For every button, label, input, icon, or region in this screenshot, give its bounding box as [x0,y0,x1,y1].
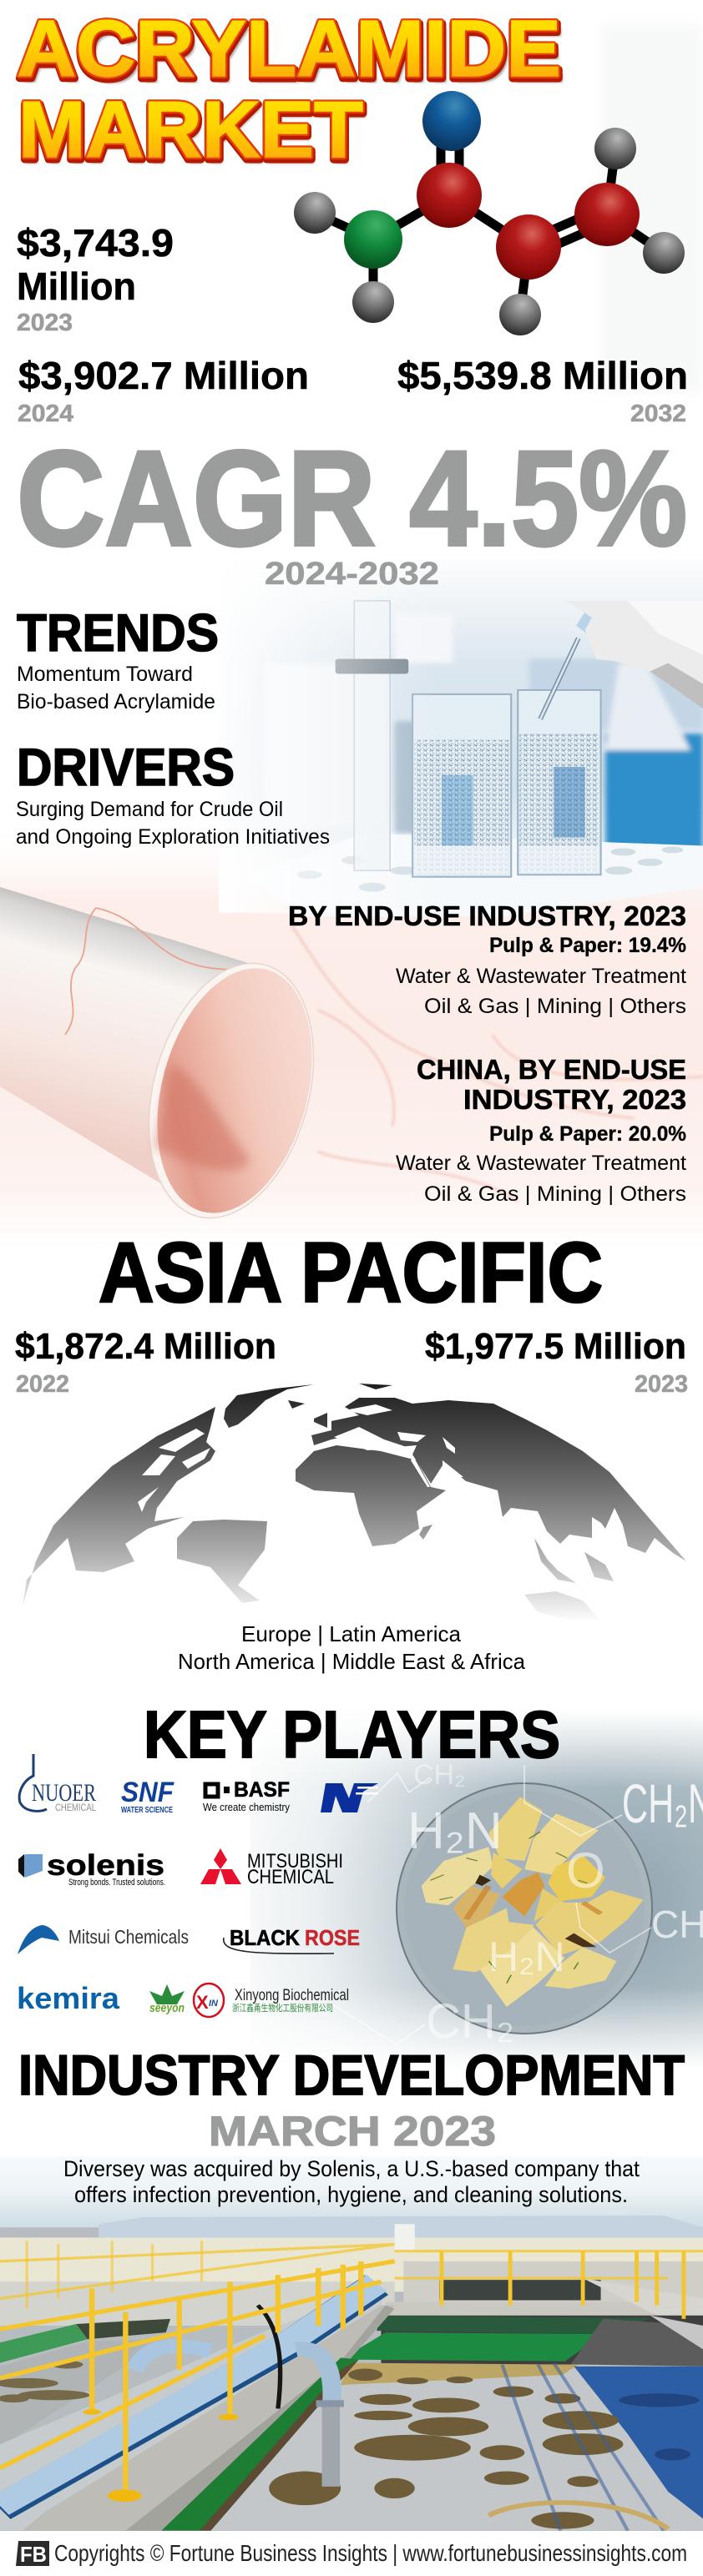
panel: laboratory photo [219,559,703,916]
text block: China by end-use industry: INDUSTRY, 2023 [463,1084,686,1115]
stat: 2024 market value: 2024 [18,401,73,427]
text block: development description: offers infection prevention, hygiene, and cleaning solutions. [74,2182,628,2207]
stat: 2032 market value: $5,539.8 Million [397,354,688,397]
logo: Mitsubishi Chemical: MITSUBISHI [247,1850,343,1873]
logo: Solenis [18,1849,165,1888]
logo: Nuoer Chemical: CHEMICAL [55,1802,96,1813]
chemical formula overlay: O [566,1843,605,1898]
stat: 2023 market value: 2023 [17,310,73,336]
subheading: date: MARCH 2023 [209,2108,496,2155]
logo: Kemira: kemira [17,1981,120,2015]
text block: other regions: North America | Middle East & Africa [178,1649,526,1674]
logo: Seeyon [149,1984,185,2015]
food [422,1797,644,2007]
heading: key players: KEY PLAYERS [144,1697,560,1772]
background: faint haze behind molecule [601,25,703,392]
logo: Seeyon: seeyon [149,2001,185,2015]
logo: Black Rose: ROSE [305,1925,360,1950]
title: ACRYLAMIDE [18,7,562,96]
beakers [412,694,511,877]
title: ACRYLAMIDE [17,4,561,93]
walkway [23,2306,395,2531]
chemical formula overlay: CH₂ [426,1994,514,2049]
left basin [0,2339,166,2447]
logo: Xinyong Biochemical: X [196,1992,209,2013]
chemical formula overlay: H₂N [488,1933,565,1980]
text block: China by end-use industry: Oil & Gas | Mining | Others [424,1182,686,1206]
logo: SNF Water Science: WATER SCIENCE [121,1806,173,1815]
logo: BASF [203,1778,290,1813]
text block: by end-use industry: BY END-USE INDUSTRY, 2023 [288,900,686,931]
text block: development description: Diversey was acquired by Solenis, a U.S.-based company that [63,2156,640,2181]
stat: 2032 market value: 2032 [630,401,686,427]
chemical formula overlay: H₂N [407,1802,503,1860]
title: ACRYLAMIDE [17,4,561,93]
logo: Nuoer Chemical [19,1754,96,1813]
logo: Xinyong Biochemical: 浙江鑫甬生物化工股份有限公司 [232,2002,333,2014]
stat: 2023 market value [17,221,174,336]
logo: BASF: BASF [234,1778,290,1802]
title: MARKET [19,88,364,177]
plate [397,1783,652,2034]
logo: SNF Water Science: SNF [121,1777,174,1808]
text block: drivers [16,739,330,849]
panel: water treatment photo [0,2156,703,2531]
logo: Mitsui Chemicals [18,1925,189,1954]
stat: 2024 market value [18,354,309,427]
stat: Asia Pacific 2022: 2022 [16,1371,69,1398]
stat: Asia Pacific 2022: $1,872.4 Million [15,1326,276,1367]
text block: by end-use industry [288,900,686,1018]
stat: Asia Pacific 2023: 2023 [635,1371,688,1398]
rack [246,834,703,916]
logo: N mark [321,1783,378,1812]
title: MARKET [18,85,363,174]
icon: acrylamide molecule [294,91,685,335]
chemical formula overlay [407,1759,703,2049]
main basin [210,2365,703,2531]
text block: China by end-use industry: CHINA, BY END-USE [417,1054,686,1085]
icon: Fortune Business Insights logo: FB [20,2542,47,2567]
logo: Mitsui Chemicals: Mitsui Chemicals [68,1926,189,1948]
icon: rolled marble paper [0,887,340,1237]
text block: trends [17,604,219,713]
stat: 2023 market value: $3,743.9 [17,221,174,265]
logo: Xinyong Biochemical: Xinyong Biochemical [235,1987,349,2004]
logo: Solenis: Strong bonds. Trusted solutions. [68,1878,165,1888]
title: MARKET [22,92,367,181]
icon: world globe [23,1384,686,1621]
text block: by end-use industry: Pulp & Paper: 19.4% [489,934,686,957]
title: MARKET [18,85,363,174]
text block: China by end-use industry: Water & Wastewater Treatment [396,1152,686,1175]
text block: trends: Momentum Toward [17,663,193,686]
stat: 2032 market value [397,354,688,427]
logo: Black Rose: BLACK [230,1925,300,1950]
pipette and glove [540,638,579,719]
text block: development description [63,2156,640,2207]
panel: marble background [0,823,703,1248]
stat: 2023 market value: Million [17,265,136,308]
stat: 2024 market value: $3,902.7 Million [18,354,309,397]
stat: Asia Pacific 2023: $1,977.5 Million [425,1326,686,1367]
pipe [0,2285,377,2508]
logo: Mitsubishi Chemical [200,1848,343,1888]
text block: other regions: Europe | Latin America [241,1621,462,1646]
right deck and back wall [386,2302,703,2319]
text block: China by end-use industry: Pulp & Paper: 20.0% [489,1122,686,1146]
logo: Xinyong Biochemical: IN [209,1999,219,2009]
text block: drivers: and Ongoing Exploration Initiatives [16,825,330,849]
tube [354,601,390,870]
text block: drivers: Surging Demand for Crude Oil [16,798,283,821]
heading: Asia Pacific: ASIA PACIFIC [99,1225,603,1320]
text block: by end-use industry: Oil & Gas | Mining | Others [424,995,686,1018]
logo: BASF: We create chemistry [203,1801,290,1813]
text block: China by end-use industry [396,1054,686,1206]
title: ACRYLAMIDE [22,11,566,100]
text block: other regions [178,1621,526,1674]
logo: Xinyong Biochemical [194,1984,349,2017]
yellow railings [0,2241,703,2500]
stat: Asia Pacific 2022 [15,1326,276,1398]
logo: Black Rose [224,1925,360,1953]
stat: Asia Pacific 2023 [425,1326,688,1398]
text block: trends: Bio-based Acrylamide [17,690,215,713]
big number: CAGR: 2024-2032 [265,557,439,592]
text block: trends: TRENDS [17,604,219,663]
logo: Nuoer Chemical: NUOER [32,1779,96,1807]
title [17,4,566,181]
text block: drivers: DRIVERS [17,739,235,797]
text block: by end-use industry: Water & Wastewater Treatment [396,965,686,988]
logo: Solenis: solenis [47,1849,164,1882]
panel: food plate photo [250,1709,703,2069]
logo: Mitsubishi Chemical: CHEMICAL [247,1866,334,1888]
chemical formula overlay: CH₂ [413,1759,465,1791]
